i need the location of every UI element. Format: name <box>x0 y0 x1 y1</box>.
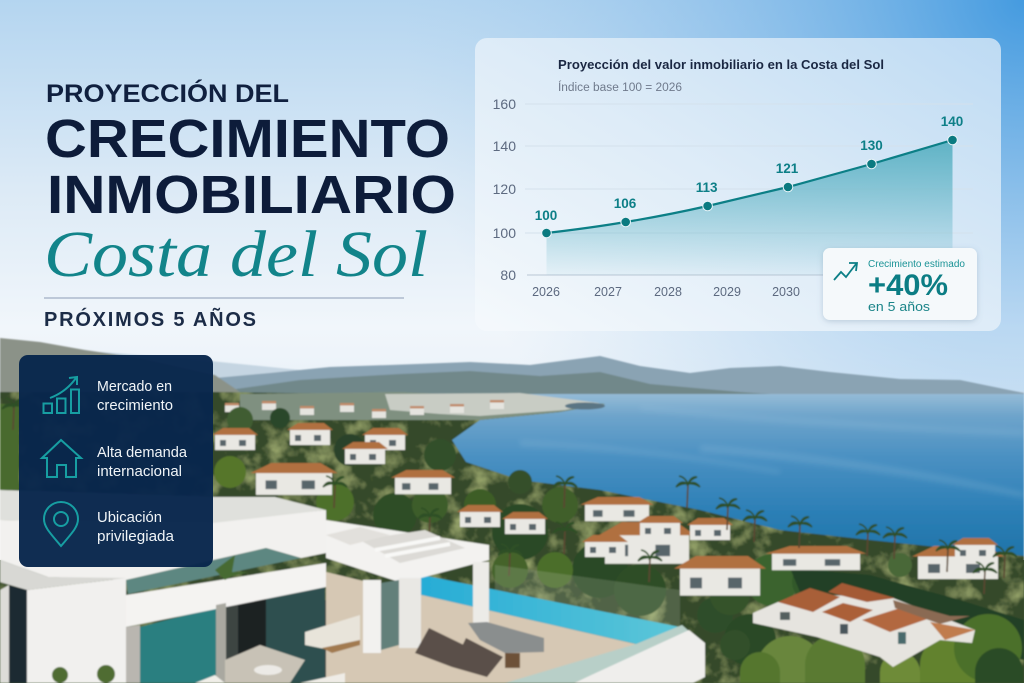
line chart: 120 <box>493 181 516 197</box>
line chart: 2028 <box>654 285 682 299</box>
upper roof deck <box>0 490 326 525</box>
mid-distance villas <box>212 423 1004 596</box>
glass railing over vegetation <box>495 565 680 627</box>
small plants <box>52 667 68 683</box>
mountains <box>0 338 1024 410</box>
distant town <box>225 392 605 420</box>
lounge chairs <box>415 628 468 667</box>
palm trees <box>2 398 1017 594</box>
chart title: Proyección del valor inmobiliario en la Costa del Sol <box>558 58 884 72</box>
line chart <box>493 96 973 299</box>
foreground white house on the right <box>753 583 975 667</box>
text: market growing: Mercado en <box>97 379 172 395</box>
text: privileged location: Ubicación <box>97 510 162 526</box>
line chart: 121 <box>776 161 799 176</box>
callout: estimated growth <box>823 248 977 320</box>
living room interior <box>218 600 326 683</box>
text: international demand: Alta demanda <box>97 445 188 461</box>
callout: estimated growth: Crecimiento estimado <box>868 259 965 270</box>
subtitle: próximos 5 años: PRÓXIMOS 5 AÑOS <box>44 307 256 331</box>
text: international demand: internacional <box>97 464 182 480</box>
line chart: 106 <box>614 196 637 211</box>
text: international demand <box>97 445 188 480</box>
title line: crecimiento: CRECIMIENTO <box>45 109 450 169</box>
curtains <box>140 607 216 683</box>
icon: bars with arrow <box>44 377 79 413</box>
line chart: 2030 <box>772 285 800 299</box>
line chart: 113 <box>696 180 718 195</box>
white wall blocks <box>0 510 326 580</box>
patio set <box>225 645 305 683</box>
callout: estimated growth: en 5 años <box>868 299 931 314</box>
infinity pool <box>400 575 680 644</box>
icon: house <box>42 440 81 477</box>
text: market growing: crecimiento <box>97 398 173 414</box>
text: privileged location <box>97 510 175 545</box>
panel: key features <box>19 355 213 567</box>
line chart: 140 <box>493 138 516 154</box>
sky background <box>0 0 1024 420</box>
line chart: 130 <box>860 138 883 153</box>
icon: rising arrow <box>834 263 857 280</box>
hillside land <box>0 392 1024 683</box>
line chart: 160 <box>493 96 516 112</box>
pergola columns <box>363 580 381 653</box>
script subtitle: Costa del Sol: Costa del Sol <box>44 218 428 291</box>
pergola <box>326 520 489 583</box>
line chart: 2027 <box>594 285 622 299</box>
line chart: 100 <box>535 208 557 223</box>
sofa <box>305 615 360 650</box>
title line: proyección del: PROYECCIÓN DEL <box>46 78 289 108</box>
sea <box>400 394 1024 574</box>
line chart: 2026 <box>532 285 560 299</box>
line chart: 140 <box>941 114 963 129</box>
terrace glass <box>505 625 690 683</box>
terrace edge wall <box>574 630 705 683</box>
green vegetation <box>0 404 1024 683</box>
text: privileged location: privilegiada <box>97 529 175 545</box>
title block <box>44 78 456 331</box>
foreground villa with pool <box>0 490 705 683</box>
line chart: 2029 <box>713 285 741 299</box>
terrace floor <box>326 572 640 683</box>
line chart: 80 <box>500 267 516 283</box>
callout: estimated growth: +40% <box>868 269 948 302</box>
upper glass terrace <box>126 548 301 594</box>
title line: inmobiliario: INMOBILIARIO <box>47 165 456 225</box>
coastal landscape photo <box>0 338 1024 683</box>
panel: chart card <box>475 38 1001 331</box>
text: market growing <box>97 379 173 414</box>
chart subtitle: Índice base 100 = 2026 <box>558 81 682 94</box>
line chart: 100 <box>493 225 516 241</box>
icon: location pin <box>44 502 78 546</box>
base ground behind the photo <box>0 560 1024 683</box>
